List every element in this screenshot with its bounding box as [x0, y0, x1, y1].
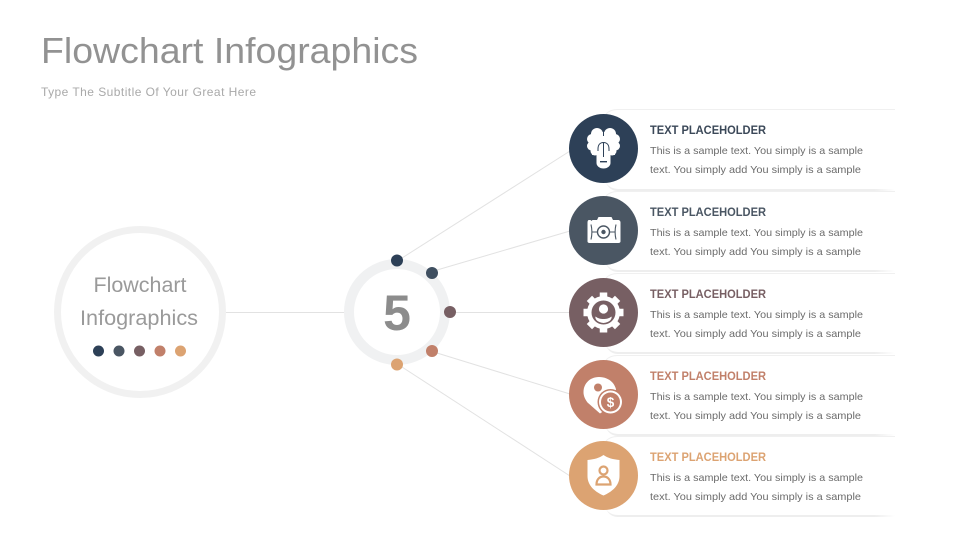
icon: location pin with dollar — [569, 360, 638, 429]
left circle: Flowchart Infographics — [58, 230, 222, 394]
left circle: Flowchart Infographics: Infographics — [80, 307, 198, 330]
card text — [650, 369, 863, 422]
card 5 — [569, 436, 895, 517]
center ring with number 5 — [349, 254, 456, 370]
title: Flowchart Infographics — [41, 30, 418, 71]
card text — [650, 123, 863, 176]
legend dots — [93, 346, 186, 356]
card text: TEXT PLACEHOLDER — [650, 123, 766, 137]
card 1 — [569, 110, 895, 191]
card text: text. You simply add You simply is a sample — [650, 491, 861, 503]
circle label: Flowchart — [94, 274, 187, 297]
card text — [650, 205, 863, 258]
card 2 — [569, 192, 895, 272]
card text: This is a sample text. You simply is a sample — [650, 309, 863, 321]
card text: TEXT PLACEHOLDER — [650, 205, 766, 219]
card 3 — [569, 274, 895, 354]
icon: camera — [569, 196, 638, 265]
card text: This is a sample text. You simply is a sample — [650, 145, 863, 157]
card text: text. You simply add You simply is a sample — [650, 246, 861, 258]
ring dots — [391, 254, 456, 370]
card text: TEXT PLACEHOLDER — [650, 450, 766, 464]
card text: TEXT PLACEHOLDER — [650, 369, 766, 383]
card text: text. You simply add You simply is a sample — [650, 328, 861, 340]
card text: This is a sample text. You simply is a sample — [650, 391, 863, 403]
card text: This is a sample text. You simply is a sample — [650, 227, 863, 239]
card 4 — [569, 356, 895, 436]
card text — [650, 287, 863, 340]
card text: This is a sample text. You simply is a sample — [650, 472, 863, 484]
icon: shield with person — [569, 441, 638, 510]
card text — [650, 450, 863, 503]
connector lines — [226, 151, 570, 476]
icon: brain with arrow — [569, 114, 638, 183]
card text: TEXT PLACEHOLDER — [650, 287, 766, 301]
subtitle: Type The Subtitle Of Your Great Here — [41, 85, 256, 99]
card text: text. You simply add You simply is a sample — [650, 410, 861, 422]
card text: text. You simply add You simply is a sample — [650, 164, 861, 176]
icon: gear with person — [569, 278, 638, 347]
number: 5 — [383, 285, 411, 341]
icon: location pin with dollar: $ — [607, 395, 615, 410]
